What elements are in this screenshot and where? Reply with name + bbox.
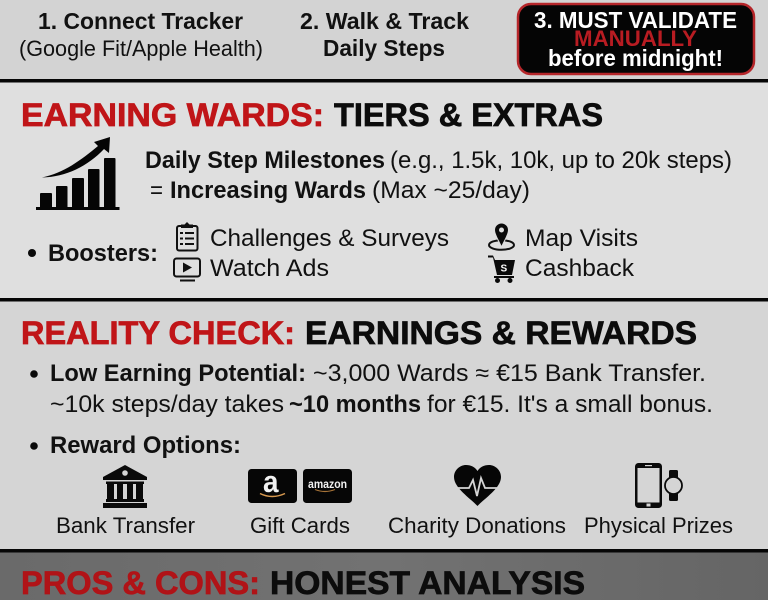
reward: bank transfer: Bank Transfer — [56, 513, 195, 538]
text: low earning potential: Low Earning Potential: — [50, 360, 306, 387]
text: low earning potential: ~10k steps/day takes — [50, 391, 284, 418]
booster: watch ads: Watch Ads — [210, 255, 329, 282]
text: daily step milestones: = — [150, 177, 163, 204]
icon: amazon a — [248, 464, 297, 503]
text: low earning potential: for €15. It's a small bonus. — [427, 391, 713, 418]
text: low earning potential — [30, 360, 713, 418]
step 1: (Google Fit/Apple Health) — [19, 36, 263, 61]
heading: reality check — [21, 315, 697, 351]
panel: earning wards — [0, 82, 768, 298]
heading: pros and cons — [21, 565, 585, 600]
heading: pros and cons: HONEST ANALYSIS — [270, 565, 585, 600]
text: daily step milestones: (Max ~25/day) — [372, 177, 530, 204]
text: daily step milestones — [145, 147, 732, 204]
text: daily step milestones: Daily Step Milestones — [145, 147, 385, 174]
step 3 callout: before midnight! — [548, 45, 723, 71]
reward: physical prizes: Physical Prizes — [584, 513, 733, 538]
boosters label: Boosters: — [48, 240, 158, 267]
text: reward options: Reward Options: — [50, 432, 241, 459]
icon: amazon wordmark: amazon — [308, 477, 347, 491]
icon: bank — [103, 465, 147, 508]
reward: gift cards: Gift Cards — [250, 513, 350, 538]
step 2 — [300, 8, 469, 61]
text: low earning potential: ~10 months — [289, 391, 421, 418]
panel: reality check — [0, 302, 768, 550]
icon: phone and watch — [635, 463, 682, 508]
booster: challenges and surveys: Challenges & Surveys — [210, 225, 449, 252]
step 1: 1. Connect Tracker — [38, 8, 243, 34]
icon: amazon wordmark — [303, 469, 352, 503]
text: daily step milestones: Increasing Wards — [170, 177, 366, 204]
icon: cashback cart: S — [500, 264, 508, 274]
step 3 callout — [518, 4, 754, 74]
step 3 callout: 3. MUST VALIDATE — [534, 7, 737, 33]
text: low earning potential: ~3,000 Wards ≈ €15 Bank Transfer. — [313, 360, 706, 387]
step 1 — [19, 8, 263, 61]
booster: map visits: Map Visits — [525, 225, 638, 252]
panel: pros and cons — [0, 552, 768, 600]
panel: steps — [0, 0, 768, 80]
heading: earning wards — [21, 97, 603, 133]
heading: earning wards: EARNING WARDS: — [21, 97, 324, 133]
step 2: 2. Walk & Track — [300, 8, 469, 34]
icon: cashback cart — [488, 256, 515, 283]
step 2: Daily Steps — [323, 35, 445, 61]
booster: cashback: Cashback — [525, 255, 635, 282]
icon: clipboard — [177, 222, 198, 250]
heading: reality check: REALITY CHECK: — [21, 315, 295, 351]
text: daily step milestones: (e.g., 1.5k, 10k, up to 20k steps) — [390, 147, 732, 174]
icon: play screen — [174, 258, 200, 282]
icon: heart with pulse — [453, 465, 502, 506]
icon: amazon a: a — [263, 464, 279, 499]
reward: charity donations: Charity Donations — [388, 513, 566, 538]
icon: map pin — [489, 223, 514, 250]
heading: reality check: EARNINGS & REWARDS — [305, 315, 697, 351]
heading: earning wards: TIERS & EXTRAS — [334, 97, 603, 133]
icon: growth chart — [36, 137, 120, 210]
step 3 callout: MANUALLY — [574, 26, 697, 51]
heading: pros and cons: PROS & CONS: — [21, 565, 260, 600]
